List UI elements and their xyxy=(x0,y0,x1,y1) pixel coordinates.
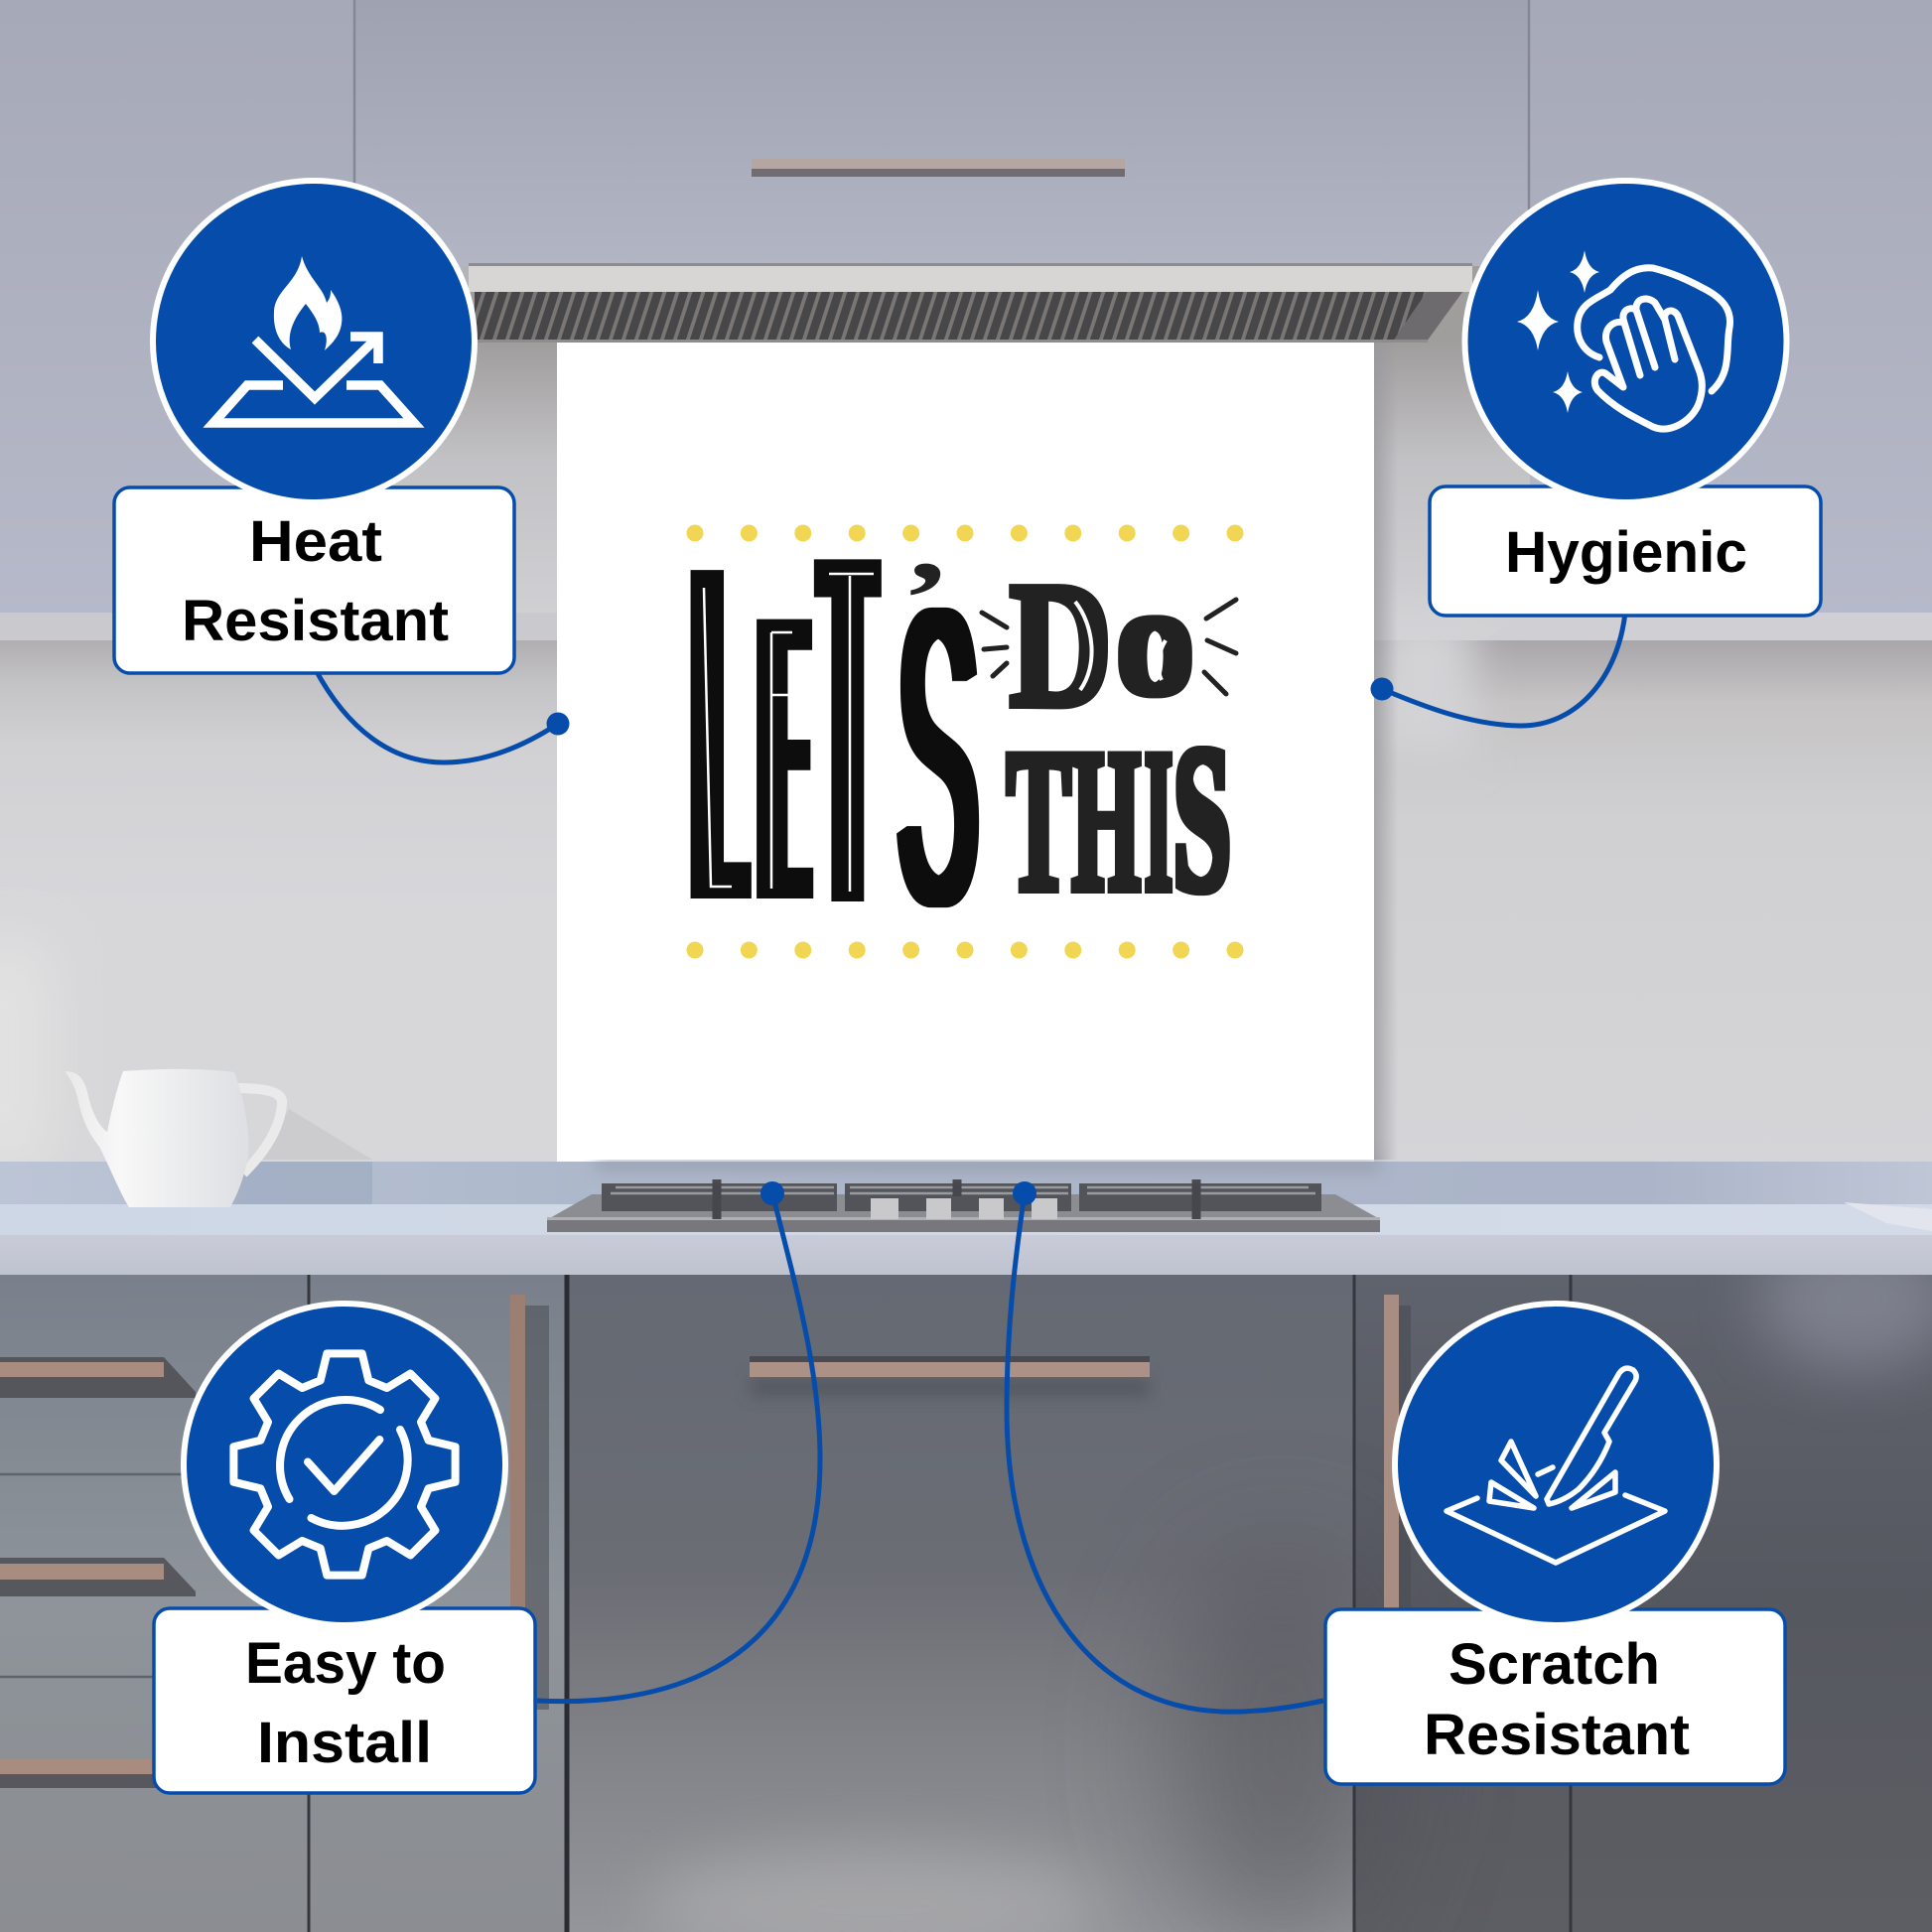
teapot xyxy=(65,1069,372,1207)
icon circle xyxy=(153,181,475,502)
lettering apostrophe: ’ xyxy=(901,541,951,656)
shadow of splashback panel xyxy=(596,1156,1380,1172)
main seam xyxy=(564,1275,570,1932)
label line 1: Easy to xyxy=(245,1631,446,1696)
connector: easy to install xyxy=(537,1181,820,1702)
base cabinets right xyxy=(1355,1275,1932,1932)
left cabinet bottom strip xyxy=(0,613,557,640)
centre upper cabinet xyxy=(355,0,1528,266)
lettering: LET xyxy=(697,452,871,1007)
letter highlights xyxy=(704,574,874,892)
wall behind hood xyxy=(354,263,1530,645)
label line 2: Resistant xyxy=(182,589,449,653)
lettering: DO: D xyxy=(1010,547,1112,745)
label box xyxy=(154,1608,535,1793)
base cabinets left xyxy=(0,1275,567,1932)
connector: hygienic xyxy=(1370,613,1625,726)
splashback panel xyxy=(557,343,1374,1160)
label box xyxy=(1430,486,1821,616)
connector: scratch resistant xyxy=(1007,1181,1323,1712)
lettering: LET: T xyxy=(825,452,871,1007)
right cabinet bottom strip xyxy=(1483,613,1932,640)
lettering: THIS: S xyxy=(1173,702,1231,936)
icon: gear with checkmark xyxy=(233,1353,456,1576)
left upper cabinet xyxy=(0,0,353,613)
lit wall right of panel xyxy=(1374,616,1473,755)
right upper cabinet xyxy=(1530,0,1932,613)
DO highlights xyxy=(1075,602,1166,690)
lettering: S: S xyxy=(898,521,978,994)
extractor hood xyxy=(469,263,1472,343)
base cabinet centre xyxy=(567,1275,1355,1932)
lettering: THIS: I xyxy=(1146,709,1172,935)
lettering: LET: E xyxy=(764,531,803,985)
icon circle xyxy=(1465,181,1787,502)
lettering: DO: o xyxy=(1115,553,1195,727)
drawer handles xyxy=(0,1357,196,1788)
lettering: THIS: T xyxy=(1007,707,1071,934)
lettering: DO xyxy=(1010,547,1195,745)
centre door handle xyxy=(750,1356,1150,1396)
cabinet seams xyxy=(354,0,1529,266)
label box xyxy=(114,487,514,673)
icon: knife scratching surface xyxy=(1447,1368,1665,1563)
emphasis rays xyxy=(982,600,1236,694)
countertop front edge xyxy=(0,1235,1932,1275)
panel side shadow xyxy=(1374,343,1398,1160)
lower wall left xyxy=(0,640,557,1167)
backsplash band xyxy=(0,1162,1932,1205)
top dots row xyxy=(687,524,1243,542)
label line 2: Install xyxy=(257,1711,432,1775)
feature: hygienic xyxy=(1430,181,1821,616)
label text: Hygienic xyxy=(1505,520,1747,585)
label line 1: Scratch xyxy=(1449,1632,1660,1697)
lettering: LET: L xyxy=(697,468,741,1001)
label line 1: Heat xyxy=(249,509,382,574)
bottom dots row xyxy=(687,941,1243,959)
vertical handle right xyxy=(1384,1295,1411,1613)
lit wall left edge xyxy=(0,943,50,1172)
label line 2: Resistant xyxy=(1424,1703,1690,1767)
feature: easy to install xyxy=(154,1304,535,1793)
drawer seams xyxy=(0,1474,309,1677)
lettering: THIS xyxy=(1007,702,1231,936)
countertop surface xyxy=(0,1204,1932,1236)
lower wall right xyxy=(1374,640,1932,1167)
dark reflection on centre door xyxy=(1172,1549,1390,1932)
label box xyxy=(1325,1609,1785,1784)
icon circle xyxy=(184,1304,505,1625)
feature: heat resistant xyxy=(114,181,514,673)
highlight right door xyxy=(1757,1231,1932,1370)
icon: wiping hand and sparkles xyxy=(1517,250,1730,429)
connector: heat resistant xyxy=(315,668,570,762)
base cabinet seams xyxy=(309,1275,1571,1932)
panel surface xyxy=(557,343,1374,1160)
vertical handle left xyxy=(510,1295,549,1710)
gas hob xyxy=(547,1179,1380,1232)
feature: scratch resistant xyxy=(1325,1304,1785,1784)
icon circle xyxy=(1395,1304,1717,1625)
lettering: THIS: H xyxy=(1072,707,1140,935)
highlight centre floor xyxy=(645,1847,1102,1932)
counter item far right xyxy=(1844,1202,1932,1231)
left cabinet end piece xyxy=(354,263,469,343)
upper centre handle xyxy=(752,159,1125,177)
icon: flame on surface xyxy=(213,256,414,423)
